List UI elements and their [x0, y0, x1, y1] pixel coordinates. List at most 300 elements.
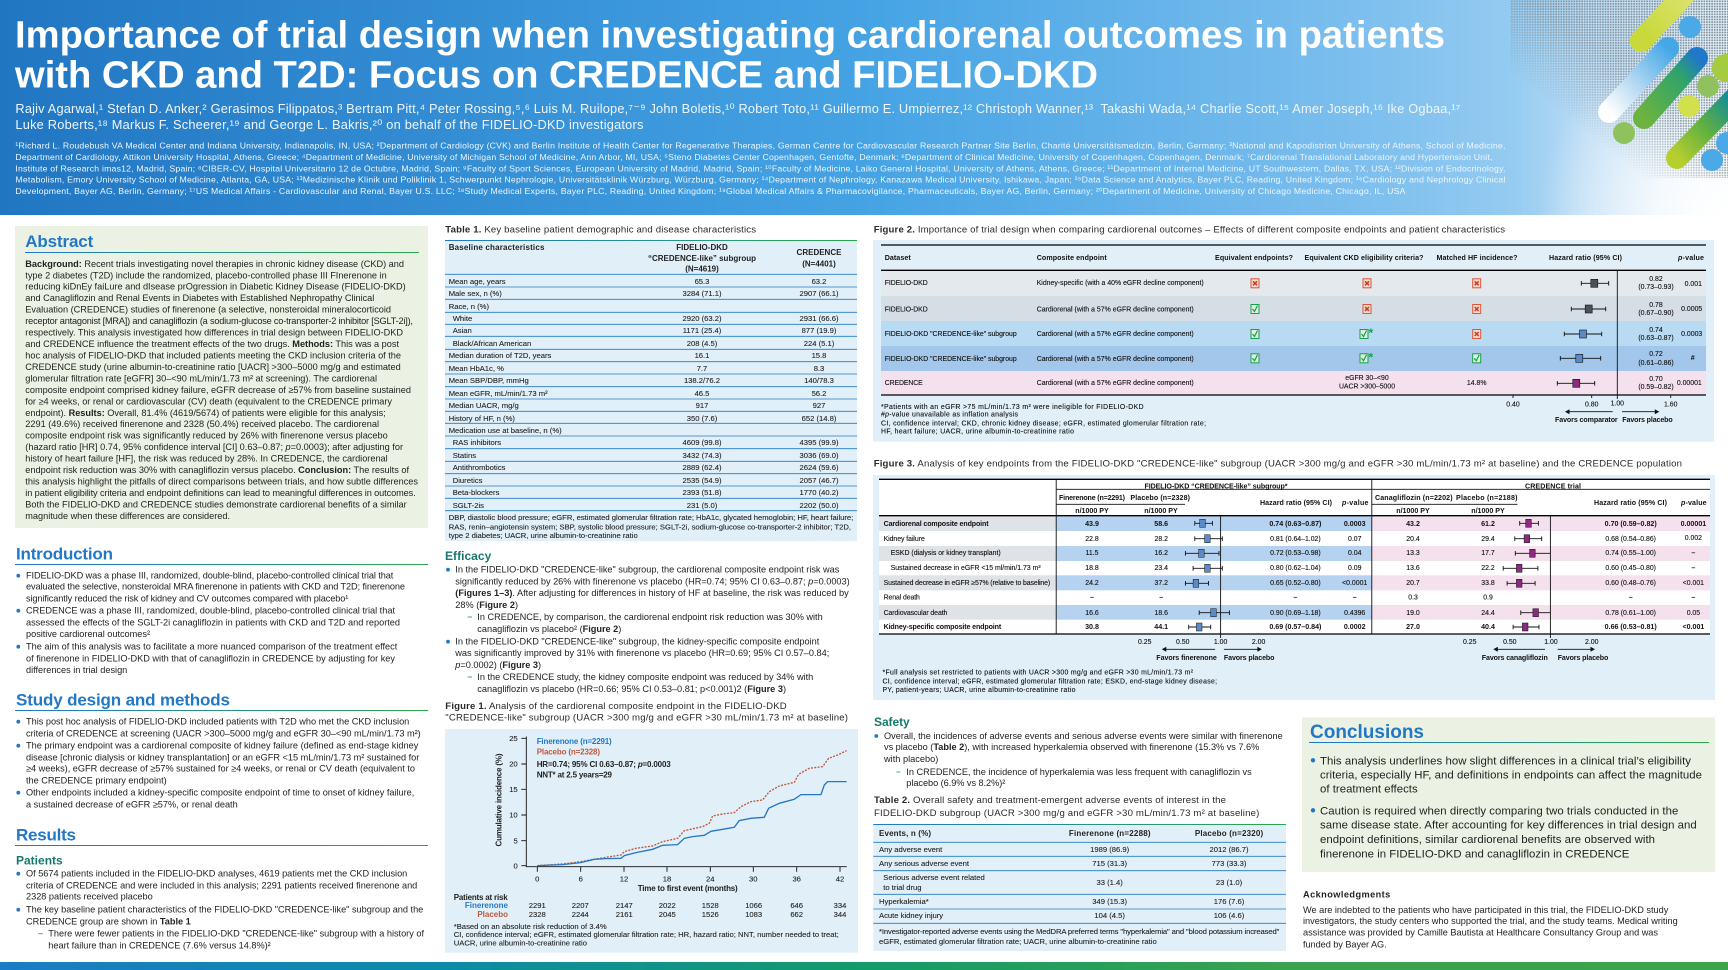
table 1 rows: 46.5 [695, 389, 709, 398]
table 1 rows: White [453, 314, 472, 323]
efficacy bullets: 28% (Figure 2) [455, 600, 518, 610]
title [14, 14, 1445, 96]
figure 3 axes and favors arrows: 0.25 [1463, 639, 1477, 646]
patients at risk table: 2022 [659, 901, 676, 910]
efficacy bullets: In CREDENCE, by comparison, the cardiorenal endpoint risk reduction was 30% with [477, 612, 823, 622]
table 1 footnote: RAS, renin–angiotensin system; SBP, systolic blood pressure; SGLT-2i, sodium-glucose co-transporter-2 inhibitor; T2D, [449, 522, 851, 531]
title: Importance of trial design when investigating cardiorenal outcomes in patients [15, 14, 1445, 56]
figure 3 CREDENCE values: 0.60 (0.45–0.80) [1605, 565, 1656, 572]
figure 3 FIDELIO-DKD values: – [1353, 594, 1357, 602]
safety bullets: Overall, the incidences of adverse events and serious adverse events were similar with finerenone [884, 731, 1283, 741]
table 2 header: Finerenone (n=2288) [1069, 829, 1151, 838]
chart axes: 24 [706, 874, 715, 883]
introduction bullets: CREDENCE was a phase III, randomized, double-blind, placebo-controlled clinical trial that [26, 606, 395, 616]
patients at risk table: 2147 [616, 901, 633, 910]
study design bullets: the CREDENCE primary endpoint) [26, 776, 167, 786]
abstract text: receptor antagonist [MRA]) and canagliflozin (a sodium-glucose co-transporter-2 inhibitor [SGLT-2i]), [25, 316, 413, 326]
panel: conclusions [1302, 717, 1715, 872]
abstract text: for ≥4 weeks, or renal or cardiovascular (CV) death (equivalent to the CREDENCE primary [25, 396, 392, 406]
introduction bullets [16, 571, 405, 675]
abstract text: composite endpoint risk was significantly reduced by 26% with finerenone versus placebo [25, 431, 388, 441]
affiliations [15, 141, 1505, 196]
figure 3 CREDENCE values: 20.4 [1406, 536, 1420, 543]
table 1 rows: 2202 (50.0) [799, 501, 839, 510]
decorative capsule graphic [1510, 0, 1728, 178]
chart legend: Placebo (n=2328) [537, 747, 600, 756]
figure 3 header: p-value [1341, 499, 1369, 507]
patients bullets: Of 5674 patients included in the FIDELIO-DKD analyses, 4619 patients met the CKD inclusion [26, 869, 407, 879]
table 1 rows: 927 [813, 401, 825, 410]
table 1 rows: 15.8 [812, 351, 826, 360]
table 1 rows: Race, n (%) [449, 302, 489, 311]
figure 3 FIDELIO-DKD values: 37.2 [1154, 580, 1168, 587]
authors: Luke Roberts,¹⁸ Markus F. Scheerer,¹⁹ and George L. Bakris,²⁰ on behalf of the FIDELIO-DKD investigators [15, 117, 643, 132]
figure 3 FIDELIO-DKD values: 18.6 [1154, 610, 1168, 617]
figure 2 forest plot: 0.0005 [1681, 306, 1702, 313]
figure 2 header: Composite endpoint [1037, 254, 1107, 262]
figure 2 check and cross icons: UACR >300–5000 [1339, 384, 1395, 390]
acknowledgments: We are indebted to the patients who have participated in this trial, the FIDELIO-DKD study [1303, 905, 1669, 915]
table 1 rows: Mean HbA1c, % [449, 364, 504, 373]
figure 2 check and cross icons: * [1368, 350, 1374, 364]
figure 3 CREDENCE values: 22.2 [1481, 565, 1495, 572]
table 1 rows: Asian [453, 326, 472, 335]
table 1 rows: Antithrombotics [453, 463, 506, 472]
safety bullets: In CREDENCE, the incidence of hyperkalemia was less frequent with canagliflozin vs [906, 767, 1252, 777]
patients bullets: CREDENCE group are shown in Table 1 [26, 917, 191, 927]
table 2 rows: 33 (1.4) [1097, 878, 1123, 887]
table 1 rows: 65.3 [695, 277, 709, 286]
affiliations: Metabolism, Emory University School of Medicine, Atlanta, GA, USA; ¹³Medizinische Klinik und Poliklinik 1, Schwerpunkt Nephrologie, Universitätsklinik Würzburg, Würzburg, Germany; ¹⁴Department of Nephrology, Kanazawa Medical University, Ishikawa, Japan; ¹⁵Data Science and Analytics, Bayer PLC, Reading, United Kingdom; ¹⁶Cardiology and Nephrology Clinical [15, 174, 1505, 184]
table 2 title: FIDELIO-DKD subgroup (UACR >300 mg/g and eGFR >30 mL/min/1.73 m² at baseline) [874, 808, 1259, 819]
figure 2 header [885, 254, 1704, 262]
abstract text: glomerular filtration rate [eGFR] 30–<90 mL/min/1.73 m² at screening). The cardiorenal [25, 373, 377, 383]
figure 2 forest plot: Favors comparator [1555, 416, 1618, 424]
figure 2 header: Matched HF incidence? [1436, 254, 1518, 262]
chart axes: 6 [579, 874, 583, 883]
acknowledgments: assistance was provided by Camille Bautista at Healthcare Consultancy Group and was [1303, 928, 1658, 938]
figure 2 forest plot: (0.73–0.93) [1638, 284, 1674, 291]
table 1 header row: “CREDENCE-like” subgroup [648, 254, 756, 263]
figure 2 dataset and endpoint labels: FIDELIO-DKD [885, 280, 928, 287]
table 2 footnote: eGFR, estimated glomerular filtration rate; UACR, urine albumin-to-creatinine ratio [879, 937, 1157, 946]
figure 3 axes and favors arrows: Favors canagliflozin [1482, 654, 1548, 662]
table 1 rows: SGLT-2is [453, 501, 484, 510]
conclusions bullets: endpoint definitions, similar cardiorenal benefits are observed with [1320, 834, 1655, 846]
figure 2 forest plot: 0.82 [1649, 276, 1663, 283]
figure 3 forest plot markers [1185, 519, 1550, 631]
table 1 rows: 56.2 [812, 389, 826, 398]
figure 3 FIDELIO-DKD values: 43.9 [1085, 520, 1099, 528]
figure 3: key endpoints table [873, 459, 1715, 700]
acknowledgments: investigators, the study centers who supported the trial, and the study teams. Medical writing [1303, 916, 1678, 926]
figure 3 FIDELIO-DKD values: 30.8 [1085, 623, 1099, 631]
chart axes: 25 [509, 734, 518, 743]
figure 3 FIDELIO-DKD values: 16.6 [1085, 610, 1099, 617]
authors [15, 101, 1461, 132]
patients at risk table: 646 [790, 901, 803, 910]
patients at risk table: Patients at risk [454, 893, 508, 902]
figure 3 CREDENCE values: 0.78 (0.61–1.00) [1605, 610, 1656, 617]
abstract text: this analysis highlight the pitfalls of direct comparisons between trials, and how subtle differences [25, 476, 418, 486]
figure 3 header: Placebo (n=2188) [1456, 494, 1518, 502]
table 2 header: Placebo (n=2320) [1195, 829, 1263, 838]
figure 2 header: Dataset [885, 254, 911, 262]
figure 1: Kaplan-Meier chart [445, 701, 858, 953]
conclusions bullets: This analysis underlines how slight differences in a clinical trial’s eligibility [1320, 755, 1691, 767]
figure 2 header: Equivalent CKD eligibility criteria? [1304, 254, 1424, 262]
figure 1 footnote: UACR, urine albumin-to-creatinine ratio [454, 938, 587, 947]
table 1 rows: 2057 (46.7) [799, 476, 839, 485]
figure 3 axes and favors arrows: Favors finerenone [1156, 654, 1217, 662]
figure 3 endpoint labels: ESKD (dialysis or kidney transplant) [891, 550, 1001, 557]
figure 3 CREDENCE values: – [1691, 564, 1695, 572]
figure 3 CREDENCE values: 19.0 [1406, 610, 1420, 617]
figure 3 header: n/1000 PY [1075, 507, 1109, 515]
figure 3 endpoint labels: Sustained decrease in eGFR ≥57% (relative to baseline) [884, 580, 1050, 587]
patients at risk table: 662 [790, 910, 803, 919]
table 2 rows: to trial drug [883, 883, 922, 892]
efficacy bullets: In the CREDENCE study, the kidney composite endpoint was reduced by 34% with [477, 672, 813, 682]
table 1 header row: (N=4401) [802, 259, 836, 268]
figure 2 forest plot: 0.0003 [1681, 331, 1702, 338]
patients at risk table: 1528 [702, 901, 719, 910]
panel: abstract [15, 226, 428, 528]
table 1 rows: 2931 (66.6) [799, 314, 839, 323]
figure 2 dataset and endpoint labels: Cardiorenal (with a 57% eGFR decline component) [1037, 380, 1194, 387]
figure 3 FIDELIO-DKD values: 23.4 [1154, 565, 1168, 572]
patients bullets: The key baseline patient characteristics of the FIDELIO-DKD "CREDENCE-like" subgroup and the [26, 905, 423, 915]
abstract text [25, 259, 418, 521]
introduction bullets: assessed the effects of the SGLT-2i canagliflozin in patients with CKD and T2D and reported [26, 618, 400, 628]
efficacy bullets: p=0.0002) (Figure 3) [454, 660, 541, 670]
study design bullets: a sustained decrease of eGFR ≥57%, or renal death [26, 800, 238, 810]
figure 1 title [445, 701, 848, 724]
figure 1 title: "CREDENCE-like" subgroup (UACR >300 mg/g and eGFR >30 mL/min/1.73 m² at baseline) [445, 713, 848, 724]
section: results, patients [15, 826, 428, 951]
table 1 rows: 16.1 [695, 351, 709, 360]
introduction bullets: differences in trial design [26, 665, 127, 675]
table 1 rows: 208 (4.5) [687, 339, 718, 348]
figure 3 CREDENCE values: 24.4 [1481, 610, 1495, 617]
header banner [0, 0, 1728, 215]
study design bullets: ≥4 weeks), eGFR decrease of ≥57% sustained for ≥4 weeks, or renal or CV death (equivalent to [26, 764, 415, 774]
table 1 rows: 1770 (40.2) [799, 488, 839, 497]
efficacy bullets: canagliflozin vs placebo² (Figure 2) [477, 624, 621, 634]
chart axes: 20 [509, 760, 518, 769]
safety bullets [874, 731, 1283, 788]
figure 3 CREDENCE values: 0.74 (0.55–1.00) [1605, 550, 1656, 557]
results heading: Results [16, 826, 76, 845]
figure 3 FIDELIO-DKD values: 0.72 (0.53–0.98) [1270, 550, 1321, 557]
abstract text: (hazard ratio [HR] 0.74, 95% confidence interval [CI] 0.63–0.87; p=0.0003); after adjusting for [25, 442, 403, 452]
authors: Rajiv Agarwal,¹ Stefan D. Anker,² Gerasimos Filippatos,³ Bertram Pitt,⁴ Peter Rossing,⁵,⁶ Luis M. Ruilope,⁷⁻⁹ John Boletis,¹⁰ Robert Toto,¹¹ Guillermo E. Umpierrez,¹² Christoph Wanner,¹³ Takashi Wada,¹⁴ Charlie Scott,¹⁵ Amer Joseph,¹⁶ Ike Ogbaa,¹⁷ [15, 101, 1461, 116]
figure 3 row bands [879, 479, 1710, 638]
figure 3 axes and favors arrows: 0.25 [1138, 639, 1152, 646]
patients at risk table: 1526 [702, 910, 719, 919]
conclusions bullets: of treatment effects [1320, 783, 1418, 795]
table 1 rows: Beta-blockers [453, 488, 500, 497]
safety heading: Safety [874, 715, 910, 729]
figure 3 CREDENCE values: 0.3 [1408, 594, 1418, 602]
figure 2 row bands [881, 245, 1706, 395]
figure 3 FIDELIO-DKD values: 0.07 [1348, 536, 1362, 543]
table 1 header row: Baseline characteristics [449, 243, 545, 252]
efficacy bullets: was significantly improved by 31% with finerenone vs placebo (HR=0.69; 95% CI 0.57–0.84; [454, 648, 829, 658]
figure 3 CREDENCE values: 40.4 [1481, 623, 1495, 631]
figure 3 CREDENCE values: 0.60 (0.48–0.76) [1605, 580, 1656, 587]
figure 3 FIDELIO-DKD values: 22.8 [1085, 536, 1099, 543]
efficacy bullets [446, 565, 850, 694]
table 1 rows: Medication use at baseline, n (%) [449, 426, 562, 435]
efficacy bullets: In the FIDELIO-DKD "CREDENCE-like" subgroup, the cardiorenal composite endpoint risk was [455, 565, 840, 575]
table 1 header row: FIDELIO-DKD [676, 243, 728, 252]
figure 3 FIDELIO-DKD values: 0.04 [1348, 550, 1362, 557]
figure 3 CREDENCE values: 13.6 [1406, 565, 1420, 572]
table 2 rows [879, 845, 1249, 920]
table 1 rows: 63.2 [812, 277, 826, 286]
figure 2 check and cross icons: * [1368, 326, 1374, 340]
figure 1 footnote [454, 922, 839, 947]
figure 3 header: Placebo (n=2328) [1130, 494, 1191, 502]
chart axes: 36 [792, 874, 801, 883]
abstract text: hoc analysis of FIDELIO-DKD that included patients meeting the CKD inclusion criteria of the [25, 350, 401, 360]
abstract text: composite endpoint comprised kidney failure, eGFR decrease of ≥57% from baseline sustained [25, 385, 411, 395]
figure 3 footnotes: *Full analysis set restricted to patients with UACR >300 mg/g and eGFR >30 mL/min/1.73 m² [882, 670, 1194, 676]
acknowledgments [1303, 890, 1678, 949]
figure 2 footnotes: HF, heart failure; UACR, urine albumin-to-creatinine ratio [881, 428, 1074, 436]
table 2 footnote: *Investigator-reported adverse events using the MedDRA preferred terms "hyperkalemia" and "blood potassium increased" [879, 927, 1280, 936]
figure 2 forest plot: (0.59–0.82) [1638, 384, 1674, 391]
safety bullets: with placebo) [883, 754, 938, 764]
table 1 rows: RAS inhibitors [453, 438, 501, 447]
figure 2 dataset and endpoint labels: FIDELIO-DKD "CREDENCE-like" subgroup [885, 331, 1017, 338]
table 2 rows: Any adverse event [879, 845, 943, 854]
figure 2 header: p-value [1677, 254, 1704, 262]
chart axes: 18 [663, 874, 671, 883]
abstract text: CREDENCE study (urine albumin-to-creatinine ratio [UACR] >300–5000 mg/g and estimated [25, 362, 401, 372]
chart axes [494, 734, 847, 893]
table 1 footnote: DBP, diastolic blood pressure; eGFR, estimated glomerular filtration rate; HbA1c, glycated hemoglobin; HF, heart failure; [449, 513, 853, 522]
figure 3 FIDELIO-DKD values: 0.65 (0.52–0.80) [1270, 580, 1321, 587]
table 1 rows: Mean age, years [449, 277, 506, 286]
table 1 rows: Statins [453, 451, 476, 460]
conclusions bullets: criteria, especially HF, and definitions in endpoints can affect the magnitude [1320, 769, 1702, 781]
table 1 rows: 231 (5.0) [687, 501, 718, 510]
conclusions heading: Conclusions [1310, 722, 1424, 743]
study design bullets [16, 717, 421, 810]
figure 3 CREDENCE values: – [1691, 549, 1695, 557]
figure 3 header: n/1000 PY [1471, 507, 1505, 515]
figure 3 FIDELIO-DKD values: 16.2 [1154, 550, 1168, 557]
figure 3 endpoint labels: Kidney-specific composite endpoint [884, 623, 1002, 631]
figure 3 CREDENCE values: 0.70 (0.59–0.82) [1605, 520, 1657, 528]
figure 2 dataset and endpoint labels: FIDELIO-DKD [885, 306, 928, 314]
figure 2 forest plot: Favors placebo [1622, 416, 1673, 424]
table 1 rows: 3284 (71.1) [682, 289, 722, 298]
figure 2 forest plot: 0.74 [1649, 327, 1663, 334]
figure 3 endpoint labels: Renal death [884, 594, 920, 602]
figure 2 dataset and endpoint labels: Cardiorenal (with a 57% eGFR decline component) [1037, 306, 1194, 314]
table 1 header row: (N=4619) [685, 264, 719, 273]
introduction bullets: FIDELIO-DKD was a phase III, randomized, double-blind, placebo-controlled clinical trial that [26, 571, 394, 581]
table 1 rows: 652 (14.8) [802, 414, 837, 423]
study design bullets: This post hoc analysis of FIDELIO-DKD included patients with T2D who met the CKD inclusion [26, 717, 409, 727]
patients at risk table: 2161 [616, 910, 633, 919]
conclusions bullets: same disease state. After accounting for key differences in trial design and [1320, 819, 1697, 831]
affiliations: ¹Richard L. Roudebush VA Medical Center and Indiana University, Indianapolis, IN, USA; ²Department of Cardiology (CVK) and Berlin Institute of Health Center for Regenerative Therapies, German Centre for Cardiovascular Research Partner Site Berlin, Charité Universitätsmedizin, Berlin, Germany; ³National and Kapodistrian University of Athens, School of Medicine, [15, 141, 1505, 151]
table 2 rows: 23 (1.0) [1216, 878, 1243, 887]
figure 2 forest plot: # [1691, 354, 1695, 362]
patients at risk table: 1066 [745, 901, 762, 910]
figure 2 dataset and endpoint labels: Kidney-specific (with a 40% eGFR decline component) [1037, 280, 1204, 287]
table 1 rows: 3036 (69.0) [799, 451, 839, 460]
chart legend: NNT* at 2.5 years=29 [537, 770, 613, 779]
abstract heading: Abstract [25, 232, 94, 251]
figure 2 header: Equivalent endpoints? [1215, 254, 1293, 262]
table 1 rows [449, 277, 839, 510]
figure 3 header: FIDELIO-DKD “CREDENCE-like” subgroup* [1144, 482, 1288, 490]
bottom gradient band [0, 962, 1728, 970]
table 1 footnote [449, 513, 853, 540]
figure 3 CREDENCE values: 0.00001 [1681, 520, 1706, 528]
figure 3 header [1059, 482, 1707, 515]
table 2 title [874, 795, 1259, 819]
table 1 rows: 224 (5.1) [804, 339, 835, 348]
chart axes: 15 [509, 785, 518, 794]
figure 2 dataset and endpoint labels: Cardiorenal (with a 57% eGFR decline component) [1037, 356, 1194, 363]
affiliations: Department of Cardiology, Attikon University Hospital, Athens, Greece; ⁴Department of Medicine, University of Michigan School of Medicine, Ann Arbor, MI, USA; ⁵Steno Diabetes Center Copenhagen, Gentofte, Denmark; ⁶Department of Clinical Medicine, University of Copenhagen, Copenhagen, Denmark; ⁷Cardiorenal Translational Laboratory and Hypertension Unit, [15, 152, 1492, 162]
figure 3 CREDENCE values [1406, 520, 1706, 631]
table 2 rows: 1989 (86.9) [1090, 845, 1130, 854]
table 1 rows: Male sex, n (%) [449, 289, 502, 298]
patients at risk table: 2207 [572, 901, 589, 910]
figure 3 CREDENCE values: 0.002 [1685, 535, 1702, 542]
introduction bullets: The aim of this analysis was to facilitate a more nuanced comparison of the treatment effect [26, 642, 398, 652]
conclusions bullets [1311, 755, 1702, 860]
abstract text: Evaluation (CREDENCE) studies of finerenone (a selective, nonsteroidal mineralocorticoid [25, 305, 391, 315]
abstract text: 2291 (49.6%) received finerenone and 2328 (50.4%) received placebo. The cardiorenal [25, 419, 379, 429]
study design bullets: disease [chronic dialysis or kidney transplantation] or an eGFR <15 mL/min/1.73 m² sustained for [26, 753, 419, 763]
figure 2: forest table [873, 225, 1714, 442]
figure 3 axes and favors arrows: 2.00 [1252, 639, 1265, 646]
figure 3 footnotes: CI, confidence interval; eGFR, estimated glomerular filtration rate; ESKD, end-stage kidney disease; [882, 678, 1217, 686]
introduction heading: Introduction [16, 544, 113, 563]
figure 2 dataset and endpoint labels [885, 280, 1204, 387]
table 1 rows: 2393 (51.8) [682, 488, 722, 497]
figure 2 check and cross icons: eGFR 30–<90 [1345, 375, 1389, 382]
table 1 rows: Median UACR, mg/g [449, 401, 519, 410]
table 2 title: Table 2. Overall safety and treatment-emergent adverse events of interest in the [874, 795, 1226, 806]
figure 1 footnote: CI, confidence interval; eGFR, estimated glomerular filtration rate; HR, hazard ratio; NNT, number needed to treat; [454, 930, 839, 939]
abstract text: endpoint risk reduction was 30% with canagliflozin versus placebo. Conclusion: The results of [25, 465, 409, 475]
patients at risk table: 334 [834, 901, 847, 910]
figure 3 FIDELIO-DKD values: 24.2 [1085, 580, 1099, 587]
figure 2 forest plot: 0.001 [1685, 281, 1702, 288]
table 2 rows: 176 (7.6) [1214, 897, 1245, 906]
figure 3 FIDELIO-DKD values: 0.4396 [1344, 610, 1365, 617]
abstract text: respectively. This analysis investigated how differences in trial design between FIDELIO-DKD [25, 328, 403, 338]
patients bullets: criteria of CREDENCE and were included in this analysis; 2291 patients received finerenone and [26, 881, 417, 891]
figure 2 footnotes: #p-value unavailable as inflation analysis [881, 412, 1019, 418]
abstract text: and CREDENCE influence the treatment effects of the two drugs. Methods: This was a post [25, 339, 399, 349]
table 2 header: Events, n (%) [879, 829, 931, 838]
table 2 rows: Any serious adverse event [879, 859, 970, 868]
abstract text: and Canagliflozin and Renal Events in Diabetes with Established Nephropathy Clinical [25, 293, 374, 303]
figure 2 footnotes: CI, confidence interval; CKD, chronic kidney disease; eGFR, estimated glomerular filtration rate; [881, 420, 1206, 428]
efficacy bullets: In the FIDELIO-DKD "CREDENCE-like" subgroup, the kidney-specific composite endpoint [455, 637, 820, 647]
introduction bullets: of finerenone in FIDELIO-DKD with that of canagliflozin in CREDENCE by adjusting for key [26, 654, 395, 664]
table 1 rows: Mean eGFR, mL/min/1.73 m² [449, 389, 548, 398]
figure 3 FIDELIO-DKD values: – [1090, 594, 1094, 602]
figure 3 header: n/1000 PY [1396, 507, 1430, 515]
chart axes: 12 [620, 874, 628, 883]
figure 3 footnotes [882, 670, 1217, 694]
table 1 rows: History of HF, n (%) [449, 414, 515, 423]
table 1 rows: 2889 (62.4) [682, 463, 722, 472]
placebo curve [537, 751, 847, 866]
patients bullets [16, 869, 424, 951]
chart axes: 30 [749, 874, 758, 883]
table 1: baseline characteristics [445, 225, 857, 541]
figure 3 footnotes: PY, patient-years; UACR, urine albumin-to-creatinine ratio [882, 687, 1076, 694]
section: safety [874, 715, 1283, 788]
title: with CKD and T2D: Focus on CREDENCE and FIDELIO-DKD [14, 54, 1098, 96]
abstract text: reducing kiDnEy faiLure and dIsease prOgression in Diabetic Kidney Disease (FIDELIO-DKD) [25, 282, 406, 292]
figure 3 CREDENCE values: 0.66 (0.53–0.81) [1605, 623, 1657, 631]
figure 3 FIDELIO-DKD values: 11.5 [1086, 550, 1099, 557]
patients at risk table: 2291 [529, 901, 546, 910]
table 1 rows: 4609 (99.8) [682, 438, 722, 447]
figure 2 forest plot: (0.67–0.90) [1638, 310, 1674, 317]
table 2 rows: Serious adverse event related [883, 873, 985, 882]
study design heading: Study design and methods [16, 691, 230, 710]
section: introduction [15, 544, 428, 675]
figure 3 axes and favors arrows: 0.50 [1503, 639, 1517, 646]
chart legend [537, 737, 671, 779]
figure 3 FIDELIO-DKD values: 18.8 [1085, 565, 1099, 572]
study design bullets: criteria of CREDENCE at screening (UACR >300–5000 mg/g and eGFR 30–<90 mL/min/1.73 m²) [26, 729, 421, 739]
figure 3 CREDENCE values: <0.001 [1682, 623, 1704, 631]
conclusions bullets: Caution is required when directly comparing two trials conducted in the [1320, 805, 1678, 817]
table 2 rows: 773 (33.3) [1212, 859, 1247, 868]
patients at risk table: 1083 [745, 910, 762, 919]
patients bullets: 2328 patients received placebo [26, 892, 153, 902]
figure 3 FIDELIO-DKD values: 44.1 [1154, 623, 1168, 631]
table 2 rows: 2012 (86.7) [1209, 845, 1249, 854]
table 1 rows: 4395 (99.9) [799, 438, 839, 447]
figure 2 forest plot: 0.78 [1649, 302, 1663, 309]
patients bullets: There were fewer patients in the FIDELIO-DKD "CREDENCE-like" subgroup with a history of [48, 929, 424, 939]
figure 2 title: Figure 2. Importance of trial design when comparing cardiorenal outcomes – Effects of different composite endpoints and patient characteristics [874, 225, 1505, 236]
figure 3 FIDELIO-DKD values: 0.81 (0.64–1.02) [1270, 536, 1321, 543]
table 2 rows: 715 (31.3) [1092, 859, 1128, 868]
figure 2 forest plot: (0.61–0.86) [1638, 360, 1674, 367]
figure 3 FIDELIO-DKD values: 0.69 (0.57–0.84) [1269, 623, 1322, 631]
figure 2 forest plot [1506, 270, 1702, 424]
figure 2 dataset and endpoint labels: CREDENCE [885, 380, 923, 387]
study design bullets: The primary endpoint was a cardiorenal composite of kidney failure (defined as end-stage kidney [26, 741, 419, 751]
figure 3 header: CREDENCE trial [1525, 482, 1581, 490]
figure 3 axes and favors arrows: 2.00 [1585, 639, 1599, 646]
figure 3 endpoint labels [884, 520, 1050, 631]
table 2 rows: 104 (4.5) [1094, 911, 1125, 920]
figure 3 axes and favors arrows: 0.50 [1176, 639, 1190, 646]
safety bullets: placebo (6.9% vs 8.2%)² [906, 778, 1005, 788]
finerenone curve [537, 782, 847, 866]
abstract text: in patient eligibility criteria and endpoint definitions can lead to meaningful differences in outcomes. [25, 488, 416, 498]
table 2 footnote [879, 927, 1280, 946]
